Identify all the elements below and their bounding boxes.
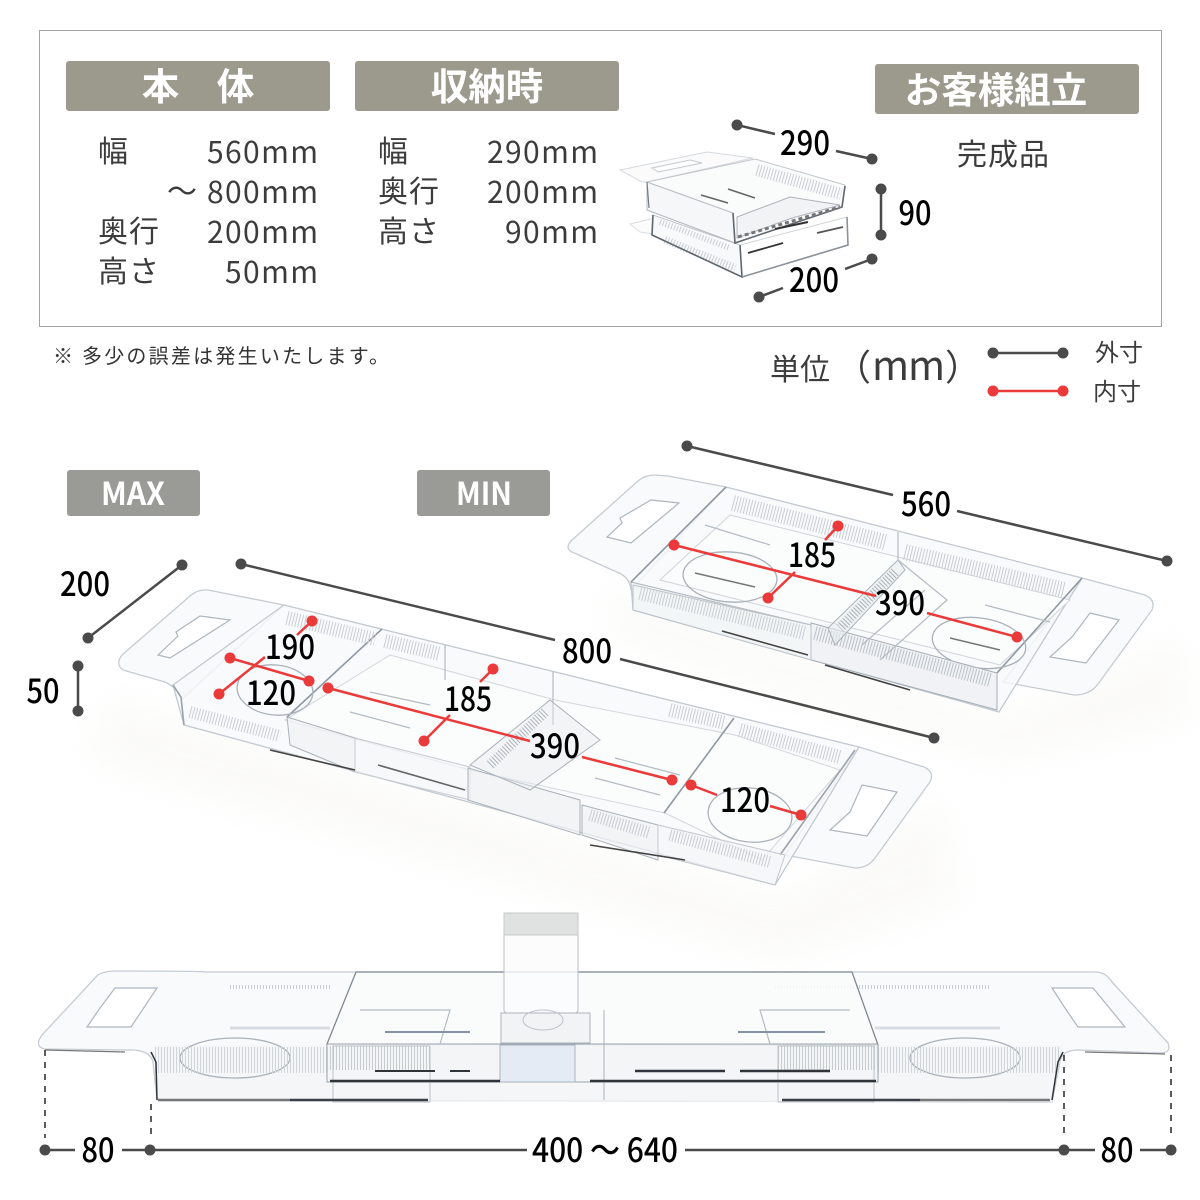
unit label: mm [872,334,945,392]
dimension: 200: 200 [789,254,839,302]
dimension: bottom 80 left: 80 [82,1124,114,1172]
dimension: 185 inner max [418,664,498,746]
dimension: 290: 290 [780,117,830,165]
dimension: 200 depth: 200 [60,558,110,606]
dimension: 90: 90 [898,187,932,235]
text block: main body dimensions: 奥行 [98,207,159,251]
dimension: 120 inner left [224,652,314,715]
text block: storage dimensions: 幅 [378,127,408,171]
dimension: 200 [754,254,878,302]
dimension: 120 inner right: 120 [720,774,770,822]
text block: main body dimensions: 200mm [207,208,318,252]
dimension: 390 inner max [322,682,678,786]
dimension: 90 [876,184,932,240]
text block: storage dimensions: 290mm [487,128,598,172]
text block: main body dimensions: 幅 [98,127,128,171]
text block: main body dimensions: 560mm [207,128,318,172]
legend: 内寸 [1093,372,1141,407]
heading: assembly [875,61,1139,114]
panel: specifications [40,30,1162,326]
badge: MIN: MIN [456,469,512,515]
text: fully assembled: 完成品 [957,130,1049,174]
text block: main body dimensions: ～ [167,167,197,211]
legend [988,333,1143,407]
text block: storage dimensions: 90mm [505,208,598,252]
dimension: 50 height [26,660,84,716]
unit label: （ [835,339,871,391]
dimension: 185 inner min [762,520,844,604]
text block: storage dimensions [378,127,598,252]
dimension: 390 inner min: 390 [875,577,925,625]
illustration: stacked tray [620,152,848,277]
unit label: 単位 [770,345,830,389]
heading: assembly: お客様組立 [905,61,1087,114]
text block: storage dimensions: 200mm [487,168,598,212]
text block: storage dimensions: 奥行 [378,167,439,211]
soft shadows [90,590,1190,960]
dimension: 800 [236,558,940,744]
dimension: 290 [732,117,878,165]
text block: storage dimensions: 高さ [378,207,439,251]
dimension: 200 depth [60,558,188,644]
dimension: 390 inner min [668,540,1022,642]
illustration: tray at maximum width [119,590,932,885]
legend: 外寸 [1095,333,1143,368]
text block: main body dimensions: 800mm [207,168,318,212]
heading: storage [355,56,619,111]
dimension: 185 inner min: 185 [788,529,836,577]
text block: main body dimensions [98,127,318,292]
heading: main body [66,56,330,111]
dimension: 390 inner max: 390 [530,720,580,768]
dimension: bottom 400 to 640: 400 ～ 640 [532,1124,678,1172]
illustration: tray at minimum width [568,475,1153,712]
dimension: 800: 800 [562,625,612,673]
dimension: 120 inner right [686,774,806,822]
dimension: 190 inner: 190 [265,621,315,669]
dimension: bottom 80 right [1058,1124,1176,1172]
unit label [770,334,981,392]
dashed guides [45,1050,1171,1138]
text block: main body dimensions: 50mm [225,248,318,292]
text block: main body dimensions: 高さ [98,247,159,291]
dimension: 50 height: 50 [26,665,60,713]
dimension: 560: 560 [901,478,951,526]
dimension: 190 inner [214,616,318,700]
dimension: 560 [682,440,1172,566]
dimension: bottom 80 left [40,1124,156,1172]
badge: MIN [417,469,550,516]
heading: storage: 収納時 [431,56,543,111]
dimension: bottom 80 right: 80 [1100,1124,1134,1172]
badge: MAX: MAX [101,469,165,515]
note: ※ 多少の誤差は発生いたします。 [53,340,389,369]
dimension: 185 inner max: 185 [444,673,492,721]
unit label: ） [945,339,981,391]
badge: MAX [67,469,200,516]
illustration: tray front view with stand [38,913,1169,1102]
dimension: 120 inner left: 120 [246,667,296,715]
heading: main body: 本 体 [142,56,255,111]
